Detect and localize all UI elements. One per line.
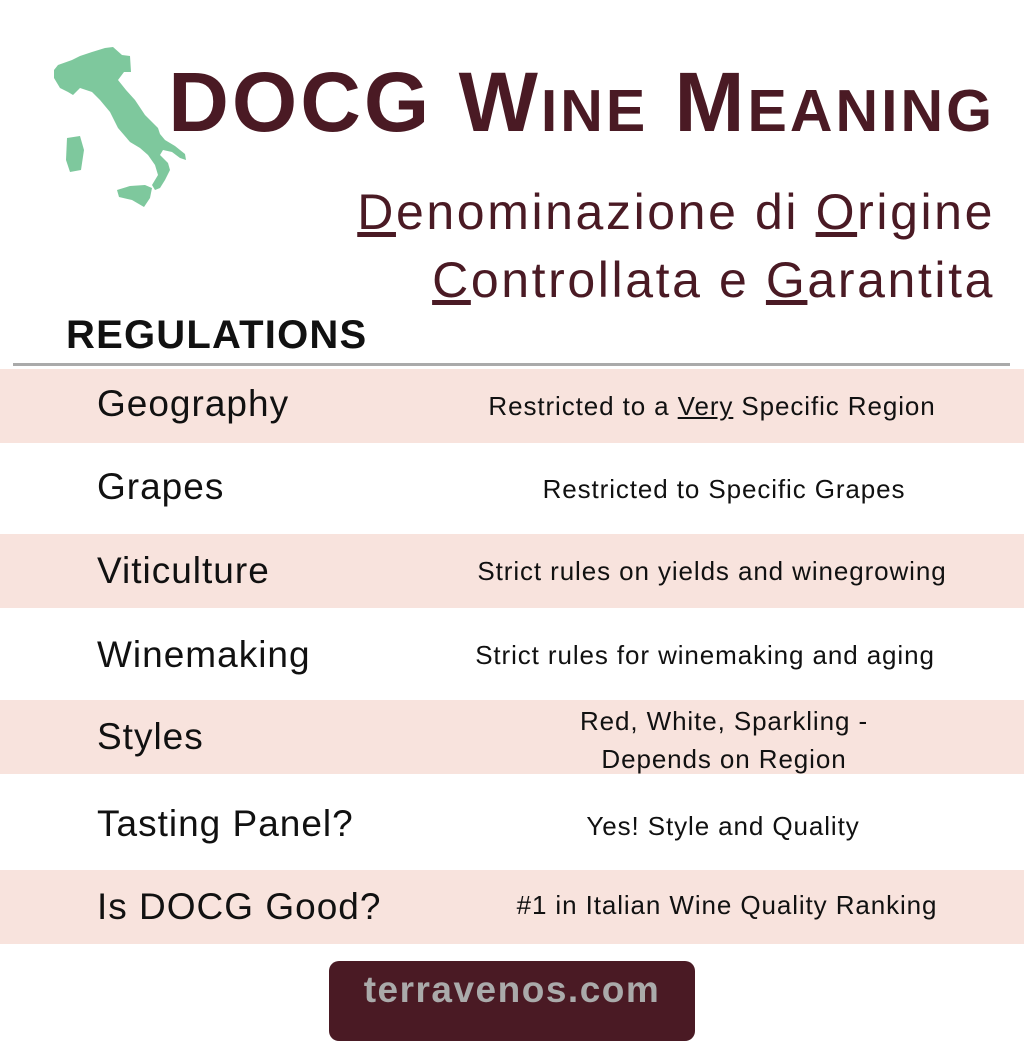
- row: grapes: Restricted to Specific Grapes: [543, 474, 905, 504]
- row: styles: Red, White, Sparkling -: [580, 706, 868, 736]
- row: winemaking: Winemaking: [97, 634, 311, 675]
- row: is DOCG good: Is DOCG Good?: [97, 886, 381, 927]
- row: styles: [97, 706, 868, 774]
- row: tasting panel: Yes! Style and Quality: [586, 811, 860, 841]
- row: geography: Geography: [97, 383, 289, 424]
- row: viticulture: Strict rules on yields and winegrowing: [477, 556, 947, 586]
- row: styles: Styles: [97, 716, 204, 757]
- title: DOCG Wine Meaning: [168, 55, 995, 149]
- map of Italy: [54, 47, 186, 207]
- subtitle: Denominazione di Origine: [357, 184, 995, 240]
- row: viticulture: Viticulture: [97, 550, 270, 591]
- table of regulations: [0, 369, 1024, 944]
- row: winemaking: Strict rules for winemaking and aging: [475, 640, 935, 670]
- subtitle: [357, 184, 995, 308]
- row: grapes: [97, 466, 905, 507]
- footer: website: [329, 961, 695, 1041]
- row: tasting panel: Tasting Panel?: [97, 803, 354, 844]
- row: styles: Depends on Region: [601, 744, 847, 774]
- row: tasting panel: [97, 803, 860, 844]
- heading: regulations: REGULATIONS: [66, 313, 367, 357]
- row: winemaking: [97, 634, 935, 675]
- row: is DOCG good: [97, 886, 937, 927]
- row: geography: [97, 383, 936, 424]
- subtitle: Controllata e Garantita: [432, 252, 995, 308]
- row: is DOCG good: #1 in Italian Wine Quality Ranking: [517, 890, 937, 920]
- row: geography: Restricted to a Very Specific Region: [488, 391, 936, 421]
- row: grapes: Grapes: [97, 466, 224, 507]
- footer: website: terravenos.com: [364, 969, 660, 1010]
- row: viticulture: [97, 550, 947, 591]
